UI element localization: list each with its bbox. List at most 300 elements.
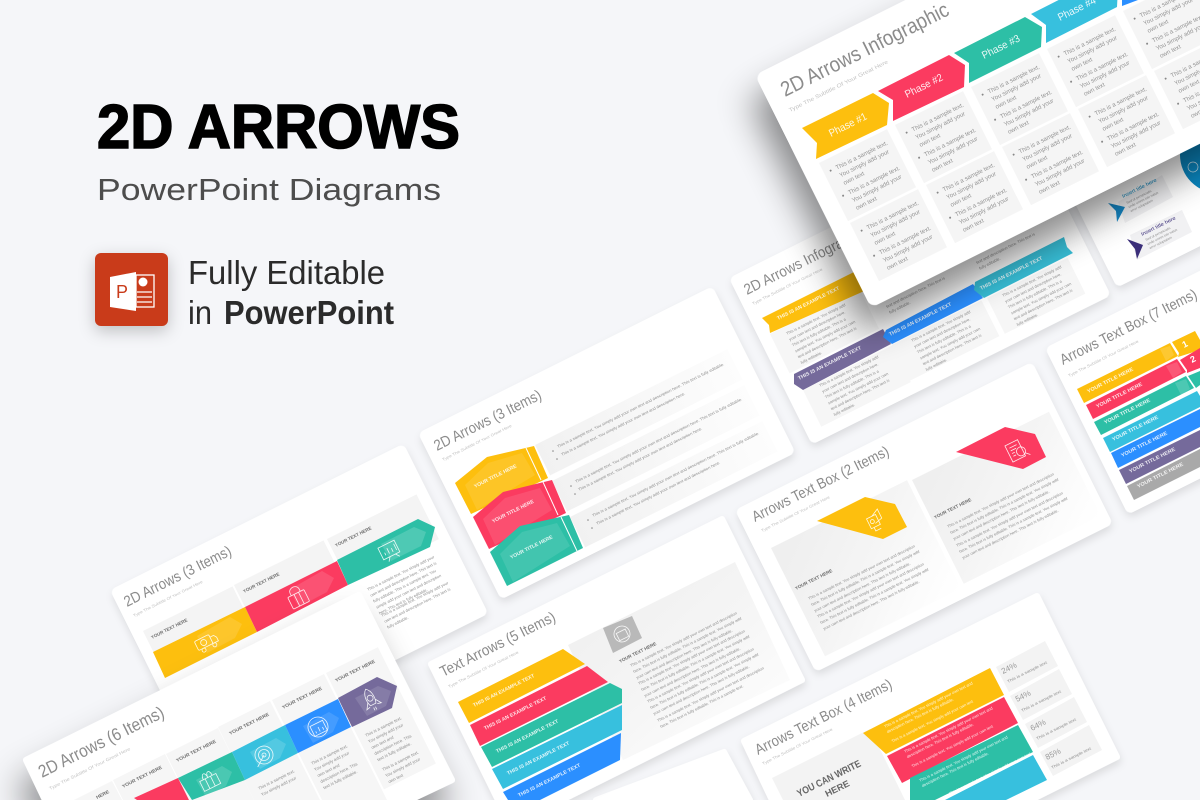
text fragments above bands: fully editable. xyxy=(888,300,911,315)
subtitle: Type The Subtitle Of Your Great Here xyxy=(751,267,823,306)
row text: This is a sample text. You simply add your own text and description here. xyxy=(577,426,703,492)
body text: here. This text is fully editable. This is a sample text. You simply add xyxy=(649,652,759,710)
body text: your own text and description here. This text is fully editable. xyxy=(643,646,741,698)
arrow: Phase 2: Phase #2 xyxy=(903,72,945,101)
right body text: This is a sample text. You simply add your own text and description xyxy=(955,490,1064,548)
subtitle: Type The Subtitle Of Your Great Here xyxy=(441,423,512,462)
body text: your own text and description here. This text is fully editable. xyxy=(652,664,750,716)
body text: here. This text is fully editable. This is a sample text. xyxy=(659,683,744,729)
stat captions: This is a sample text xyxy=(1020,688,1063,713)
cell: col 4 row 2: own text xyxy=(1114,141,1137,158)
row text: This is a sample text. You simply add your own text and description here. xyxy=(560,391,686,457)
cell: col 4 row 1 xyxy=(1047,15,1144,107)
stat captions xyxy=(1006,659,1093,770)
text: fully editable in PowerPoint xyxy=(188,254,394,331)
band: gray xyxy=(1127,449,1200,500)
cell: col 2 row 1: own text xyxy=(918,132,942,149)
arrow: Phase 1 xyxy=(802,93,889,159)
column text blue: This is a sample text. xyxy=(310,743,349,766)
band labels: THIS IS AN EXAMPLE TEXT xyxy=(979,256,1044,292)
right body text: This is a sample text. You simply add your own text and description xyxy=(946,471,1055,529)
panel: Arrows Text Box 2 Items xyxy=(735,362,1113,672)
text block under teal: This is a sample text. You simply add xyxy=(1001,264,1062,298)
cell: col 1 row 1: You simply add your xyxy=(838,148,890,179)
cell: col 1 row 1: This is a sample text. xyxy=(847,165,902,197)
cell: col 3 row 2: You simply add your xyxy=(1034,158,1086,188)
cell: col 3 row 1: own text xyxy=(994,94,1018,111)
band labels: THIS IS AN EXAMPLE TEXT xyxy=(776,286,841,322)
band labels: THIS IS AN EXAMPLE TEXT xyxy=(888,302,953,338)
cell: col 4 row 2: own text xyxy=(1101,116,1125,133)
band text: This is a sample text. You simply add your own text and xyxy=(903,706,993,754)
cell: col 3 row 1 xyxy=(971,53,1068,145)
arrow: cyan xyxy=(232,725,298,780)
text block under teal: text and description here. This text is xyxy=(1013,288,1073,321)
text block under purple: sample text. You simply add your own xyxy=(827,371,889,405)
arrow: Phase 2 xyxy=(878,55,965,121)
column text cyan: This is a sample text. xyxy=(257,768,296,791)
heading: YOUR TEXT HERE xyxy=(618,641,657,664)
text block under blue: fully editable. xyxy=(925,357,948,372)
column headings: YOUR TEXT HERE xyxy=(175,739,217,763)
right heading: YOUR TEXT HERE xyxy=(933,497,972,520)
arrow: teal band xyxy=(974,237,1073,298)
band labels: YOUR TITLE HERE xyxy=(1095,381,1144,410)
stat values: 54% xyxy=(1014,689,1032,704)
band: cyan xyxy=(1103,391,1200,452)
cell: col 2 row 2: own text xyxy=(962,217,985,234)
band: red xyxy=(887,697,1018,783)
text block under purple: your own text and description here. xyxy=(821,361,879,394)
column text purple: You simply add your xyxy=(367,722,404,744)
body text second paragraph: This is a sample text. You simply add your xyxy=(380,580,450,618)
text block under purple: This is a sample text. You simply add xyxy=(818,354,879,388)
subtitle: Type The Subtitle Of Your Great Here xyxy=(788,59,889,114)
column heading labels: YOUR TEXT HERE xyxy=(242,572,280,594)
band: blue xyxy=(1111,409,1200,468)
column headings: HERE xyxy=(95,789,110,800)
text block under blue: This text is fully editable. This is a xyxy=(916,323,972,355)
row text: This is a sample text. You simply add your own text and description here. xyxy=(595,460,721,526)
arrow: blue xyxy=(285,699,351,753)
subtitle: Type The Subtitle Of Your Great Here xyxy=(760,495,830,533)
item text two: Sed ut perspiciatis xyxy=(1145,226,1172,242)
item text two: error voluptatem xyxy=(1149,235,1173,250)
subheading: PowerPoint Diagrams: PowerPoint Diagrams xyxy=(97,172,441,207)
title: Arrows Text Box (4 Items) xyxy=(752,676,895,759)
blue circle with fingerprint xyxy=(1180,117,1200,193)
cell: col 1 row 2: You simply add your xyxy=(882,234,934,264)
text block under blue: This is a sample text. You simply add xyxy=(910,309,971,343)
body text: simply add your own text and description xyxy=(375,573,442,610)
column heading labels: YOUR TEXT HERE xyxy=(334,526,372,548)
icon: target xyxy=(250,743,276,768)
stat captions: This is a sample text xyxy=(1050,745,1093,770)
title: Arrows Text Box (2 Items) xyxy=(749,443,892,526)
arrow: Phase 3 xyxy=(954,17,1042,83)
cell: col 1 row 2: This is a sample text. xyxy=(878,225,933,257)
left body text: your own text and description here. This text is fully editable. xyxy=(822,579,920,631)
text block under yellow: fully editable. xyxy=(800,350,823,365)
text fragments above bands: fully editable. xyxy=(978,256,1001,271)
stat values: 64% xyxy=(1029,718,1047,733)
cell: col 4 row 1: You simply add your xyxy=(1066,34,1118,65)
arrow: teal xyxy=(490,515,583,586)
left callout text: YOU CAN WRITE xyxy=(795,758,863,800)
cell: col 3 row 1: This is a sample text. xyxy=(987,64,1041,96)
text block under blue: text and description here. This text is xyxy=(922,333,982,366)
cell: col 1 row 1: This is a sample text. xyxy=(835,140,889,172)
item text one: Sed ut perspiciatis xyxy=(1126,189,1153,205)
cell: col 3 row 2: You simply add your xyxy=(1021,132,1073,163)
column text purple: You simply add your xyxy=(384,756,422,778)
icon: PowerPoint logo: P xyxy=(116,282,128,302)
column headings xyxy=(95,659,376,800)
arrow: purple xyxy=(338,677,397,727)
cell: col 3 row 1: own text xyxy=(1007,119,1030,136)
cell: col 2 row 1: own text xyxy=(931,157,954,174)
band: purple xyxy=(1119,430,1200,484)
text: fully editable in PowerPoint: PowerPoint xyxy=(224,294,394,331)
icon: delivery truck xyxy=(194,632,220,654)
column heading labels: YOUR TEXT HERE xyxy=(150,618,188,640)
text cell xyxy=(568,562,790,760)
band labels: THIS IS AN EXAMPLE TEXT xyxy=(797,345,863,382)
stat values: 85% xyxy=(1044,747,1062,762)
arrow layers xyxy=(458,649,622,800)
row text: This is a sample text. You simply add your own text and description here. This text is fully editable. xyxy=(574,396,743,484)
body text: your own text and description here. This text is fully editable. xyxy=(635,628,733,680)
subtitle: Type The Subtitle Of Your Great Here xyxy=(447,650,519,689)
title: 2D Arrows (6 Items) xyxy=(35,702,167,782)
cell: col 4 row 1: This is a sample text. xyxy=(1075,51,1130,83)
cell: col 2 row 2: This is a sample text. xyxy=(942,162,996,194)
arrow: teal xyxy=(337,519,435,585)
arrow labels: YOUR TITLE HERE xyxy=(491,499,536,525)
left callout text: HERE xyxy=(823,778,851,799)
panel: insert title slide behind main xyxy=(1034,0,1200,287)
text block under yellow: This text is fully editable. This is a xyxy=(791,316,847,348)
arrow: purple band xyxy=(794,329,891,390)
arrow: yellow band xyxy=(762,264,880,333)
right body text: your own text and description here. This text is fully editable. xyxy=(961,508,1059,560)
cell: col 3 row 1: This is a sample text. xyxy=(999,89,1054,121)
text fragments above bands: text and description here. This text is xyxy=(885,275,946,309)
column headings: YOUR TEXT HERE xyxy=(334,659,376,683)
row text: This is a sample text. You simply add your own text and description here. This text is fully editable. xyxy=(591,430,760,518)
panel: 2D Arrows 3 Items left xyxy=(110,444,488,760)
text cells xyxy=(770,258,1085,427)
arrow labels: THIS IS AN EXAMPLE TEXT xyxy=(495,719,560,755)
item text two: unde omnis iste natus xyxy=(1147,228,1178,246)
arrow labels: YOUR TITLE HERE xyxy=(509,534,555,561)
cell: col 4 row 1: You simply add your xyxy=(1079,60,1131,90)
text block under blue: your own text and description here. xyxy=(913,316,971,349)
cell: col 1 row 1: own text xyxy=(842,170,866,187)
left body text xyxy=(807,543,932,631)
cell: col 4 row 2 xyxy=(1078,75,1175,167)
band text: This is a sample text. You simply add your own text and xyxy=(918,735,1008,783)
left body text: here. This text is fully editable. This is a sample text. You simply add xyxy=(810,549,920,607)
body text: here. This text is fully editable. This is a sample text. You simply add xyxy=(632,616,742,674)
body text: This is a sample text. You simply add your own text and description xyxy=(656,665,765,723)
arrow: yellow xyxy=(817,497,907,539)
cell: col 4 row 1: This is a sample text. xyxy=(1063,26,1117,58)
band: red xyxy=(1086,359,1186,419)
stat cells xyxy=(996,641,1102,776)
cell: col 4 row 2: You simply add your xyxy=(1097,94,1149,125)
number tiles: 1 xyxy=(1180,339,1189,350)
band text: description here. This text is fully editable. xyxy=(886,697,954,734)
row text xyxy=(552,361,760,529)
right body text xyxy=(946,471,1071,560)
cell: col 1 row 2: own text xyxy=(873,230,897,247)
arrow labels xyxy=(473,463,555,561)
column text purple: description here. This xyxy=(373,733,412,756)
cell: col 4 row 1: own text xyxy=(1070,56,1094,73)
body text: here. This text is fully editable. xyxy=(378,587,428,616)
right body text: here. This text is fully editable. This is a sample text. You simply add xyxy=(949,477,1059,535)
stat values xyxy=(1000,661,1062,762)
left heading: YOUR TEXT HERE xyxy=(794,568,833,591)
icon: gift xyxy=(197,769,221,791)
arrow: red xyxy=(134,778,189,800)
text block under blue: sample text. You simply add your own xyxy=(919,326,981,360)
arrow: Phase 4 xyxy=(1031,0,1118,43)
cell: col 3 row 2: This is a sample text. xyxy=(1030,149,1085,181)
text block under purple: text and description here. This text is xyxy=(830,378,890,411)
band labels: YOUR TITLE HERE xyxy=(1120,430,1169,459)
cell: col 2 row 2 xyxy=(926,151,1023,243)
cell: col 5 row 1 xyxy=(1123,0,1200,69)
arrow: teal xyxy=(178,752,245,800)
icon: document search xyxy=(1005,437,1030,463)
body text second paragraph: fully editable. xyxy=(386,615,409,630)
arrow: blue band xyxy=(883,284,983,344)
text block under purple: This text is fully editable. This is a xyxy=(824,368,880,400)
column headings: YOUR TEXT HERE xyxy=(281,686,323,710)
body text second paragraph: own text and description here. This text is xyxy=(383,587,451,624)
arrow: yellow xyxy=(455,446,548,514)
left body text: This is a sample text. You simply add your own text and description xyxy=(807,543,916,601)
panel: Arrows Text Box 4 Items xyxy=(744,596,1117,800)
cell: col 1 row 1: own text xyxy=(855,195,878,212)
body text: This is a sample text. You simply add your own text and description xyxy=(629,610,738,668)
item text one: Insert title here xyxy=(1121,177,1158,200)
icon: PowerPoint logo xyxy=(95,253,168,326)
stat captions: This is a sample text xyxy=(1035,716,1078,741)
column text purple: own text xyxy=(387,772,405,784)
icon: shopping bag xyxy=(285,583,310,609)
cell: col 5 row 1: own text xyxy=(1159,43,1182,60)
band labels xyxy=(1086,366,1185,490)
item box two xyxy=(1130,210,1192,260)
cell: col 2 row 1: This is a sample text. xyxy=(923,127,978,159)
text block under yellow: text and description here. This text is xyxy=(797,326,857,359)
title: Text Arrows (5 Items) xyxy=(437,609,558,681)
column text purple: This is a sample text. xyxy=(381,750,420,772)
body text: This is a sample text. You simply add your own text and description xyxy=(646,646,755,704)
column header cells xyxy=(143,494,439,676)
row text: This is a sample text. You simply add your own text and description here. This text is fully editable. xyxy=(556,361,725,449)
cell: col 1 row 1: You simply add your xyxy=(851,174,903,204)
body text: This is a sample text. You simply add your own text and description xyxy=(637,628,746,686)
subtitle: Type The Subtitle Of Your Great Here xyxy=(132,579,203,618)
column text blue: description here. This xyxy=(319,761,358,784)
arrow labels: THIS IS AN EXAMPLE TEXT xyxy=(483,696,548,732)
cell: col 2 row 2: You simply add your xyxy=(958,196,1010,226)
text block under teal: your own text and description here. xyxy=(1004,271,1062,304)
band text xyxy=(883,681,1032,796)
icon: megaphone xyxy=(865,509,886,532)
arrow: red xyxy=(473,480,566,549)
column text purple: This is a sample text. xyxy=(364,715,403,738)
band text: This is a sample text. You simply add your own text xyxy=(911,723,995,769)
cell: col 4 row 1: own text xyxy=(1083,81,1106,98)
icon: purple arrow xyxy=(1127,239,1143,259)
item box one xyxy=(1118,175,1173,223)
cell: col 4 row 2: You simply add your xyxy=(1110,120,1162,150)
band text: This is a sample text. You simply add your own text xyxy=(948,751,1032,796)
arrow: red xyxy=(956,427,1046,469)
body text: here. This text is fully editable. This is a sample text. You simply add xyxy=(640,634,750,692)
column cells xyxy=(74,647,436,800)
cell: col 4 row 2: This is a sample text. xyxy=(1094,86,1148,118)
left body text: your own text and description here. This text is fully editable. xyxy=(813,561,911,613)
panel: 2D Arrows Infographic small xyxy=(729,129,1111,444)
arrow: Phase 3: Phase #3 xyxy=(980,33,1022,62)
column heading labels xyxy=(150,526,372,640)
column text blue: own text and xyxy=(316,762,341,778)
text block under teal: sample text. You simply add your own xyxy=(1010,281,1072,315)
text: fully editable in PowerPoint: in xyxy=(188,294,212,331)
band text: This is a sample text. You simply add your own text and xyxy=(883,681,973,729)
text fragments above bands: text and description here. This text is xyxy=(975,231,1036,265)
cell: col 3 row 2: own text xyxy=(1025,154,1049,171)
subtitle: Type The Subtitle Of Your Great Here xyxy=(1067,339,1139,378)
text block under teal: fully editable. xyxy=(1016,312,1039,327)
text rows xyxy=(535,349,778,547)
arrow labels xyxy=(472,673,582,799)
cell: col 3 row 2: own text xyxy=(1038,179,1061,196)
panel: Text Arrows 5 Items xyxy=(431,519,802,800)
panel: blank bottom slide xyxy=(596,752,750,800)
column text purple: own text and xyxy=(370,734,395,750)
cell: col 5 row 1: own text xyxy=(1146,18,1170,35)
number tiles: 2 xyxy=(1188,354,1197,365)
band text: description here. This text is fully editable. xyxy=(921,751,989,788)
icon: gray gear square xyxy=(603,616,642,653)
cell: col 1 row 1 xyxy=(819,129,916,221)
cell: col 2 row 1: You simply add your xyxy=(927,136,979,166)
band: cyan xyxy=(945,755,1047,800)
arrow labels: THIS IS AN EXAMPLE TEXT xyxy=(506,741,571,777)
number tiles xyxy=(1172,331,1200,388)
band: teal xyxy=(1094,376,1194,435)
cell: col 2 row 2: You simply add your xyxy=(945,170,997,201)
left gray cell xyxy=(772,729,905,800)
band: teal xyxy=(910,725,1033,800)
cell: col 3 row 1: You simply add your xyxy=(1003,98,1055,128)
cell: col 3 row 1: You simply add your xyxy=(990,72,1042,103)
band labels xyxy=(776,256,1044,382)
column text cyan: You simply add your xyxy=(260,775,297,797)
arrow: Phase 1: Phase #1 xyxy=(827,111,869,140)
panel: 2D Arrows 6 Items xyxy=(26,595,452,800)
column text blue: text is fully editable. xyxy=(322,769,358,790)
cell: col 2 row 1: You simply add your xyxy=(914,110,966,141)
text fragments above bands xyxy=(885,231,1039,315)
cell: col 1 row 2: You simply add your xyxy=(869,208,921,239)
column text blue: You simply add your xyxy=(313,750,350,772)
band text: This is a sample text. You simply add your own text xyxy=(891,698,975,744)
left body text: This is a sample text. You simply add your own text and description xyxy=(816,561,925,619)
right text cell xyxy=(912,412,1101,584)
panel: Arrows Text Box 7 Items xyxy=(1045,199,1200,514)
arrow: red xyxy=(245,561,348,632)
cell: col 2 row 1: This is a sample text. xyxy=(911,102,965,134)
band: yellow xyxy=(863,668,1004,754)
arrow labels: YOUR TITLE HERE xyxy=(473,463,519,490)
arrow: Phase 5 xyxy=(1122,0,1138,6)
text block under teal: This text is fully editable. This is a xyxy=(1007,278,1063,310)
text block under yellow: your own text and description here. xyxy=(788,309,846,342)
icon: chart xyxy=(378,540,402,563)
column headings: YOUR TEXT HERE xyxy=(228,712,270,736)
cell: col 5 row 2 xyxy=(1154,37,1200,129)
stat captions: This is a sample text xyxy=(1006,659,1049,684)
text: fully editable in PowerPoint: Fully Editable xyxy=(188,254,385,291)
band labels: YOUR TITLE HERE xyxy=(1111,414,1160,443)
panel: 2D Arrows 3 Items middle xyxy=(418,286,795,599)
cell: col 1 row 2 xyxy=(850,189,947,281)
band labels: YOUR TITLE HERE xyxy=(1128,446,1177,475)
item text two xyxy=(1140,215,1180,250)
cell: col 4 row 2: This is a sample text. xyxy=(1106,111,1161,143)
column headings: YOUR TEXT HERE xyxy=(121,765,163,789)
cell: col 2 row 1 xyxy=(895,91,992,183)
left body text: here. This text is fully editable. This is a sample text. You simply add xyxy=(819,567,929,625)
cell: col 3 row 2 xyxy=(1002,113,1099,205)
item text one: error voluptatem xyxy=(1130,198,1154,213)
heading: 2D ARROWS: 2D ARROWS xyxy=(97,93,460,162)
cell: col 2 row 2: This is a sample text. xyxy=(954,187,1009,219)
subtitle: Type The Subtitle Of Your Great Here xyxy=(761,727,833,766)
cell: col 5 row 2: own text xyxy=(1177,78,1200,95)
arrow labels: THIS IS AN EXAMPLE TEXT xyxy=(472,673,536,709)
band labels: YOUR TITLE HERE xyxy=(1103,397,1152,426)
icon: blue arrow xyxy=(1108,203,1125,222)
band: yellow xyxy=(1077,343,1178,403)
body text: fully editable. This is a sample text. You xyxy=(372,568,437,604)
panel: main 2D Arrows Infographic xyxy=(755,0,1200,308)
text block under purple: fully editable. xyxy=(833,402,856,417)
band text: description here. This text is fully editable. xyxy=(906,722,974,759)
item text one xyxy=(1121,177,1161,213)
body text: own text and description here. This text is xyxy=(369,561,437,598)
text block under yellow: This is a sample text. You simply add xyxy=(785,302,846,336)
icon: rocket xyxy=(358,686,383,713)
icon: gear folder xyxy=(305,714,331,740)
cell: col 2 row 2: own text xyxy=(949,192,973,209)
title: 2D Arrows (3 Items) xyxy=(431,387,544,455)
item text two: Insert title here xyxy=(1140,215,1177,238)
text block under yellow: sample text. You simply add your own xyxy=(794,319,856,353)
stat values: 24% xyxy=(1000,661,1018,676)
band labels: YOUR TITLE HERE xyxy=(1136,461,1185,490)
cell: col 1 row 2: This is a sample text. xyxy=(866,200,920,232)
arrow: yellow xyxy=(153,607,257,678)
